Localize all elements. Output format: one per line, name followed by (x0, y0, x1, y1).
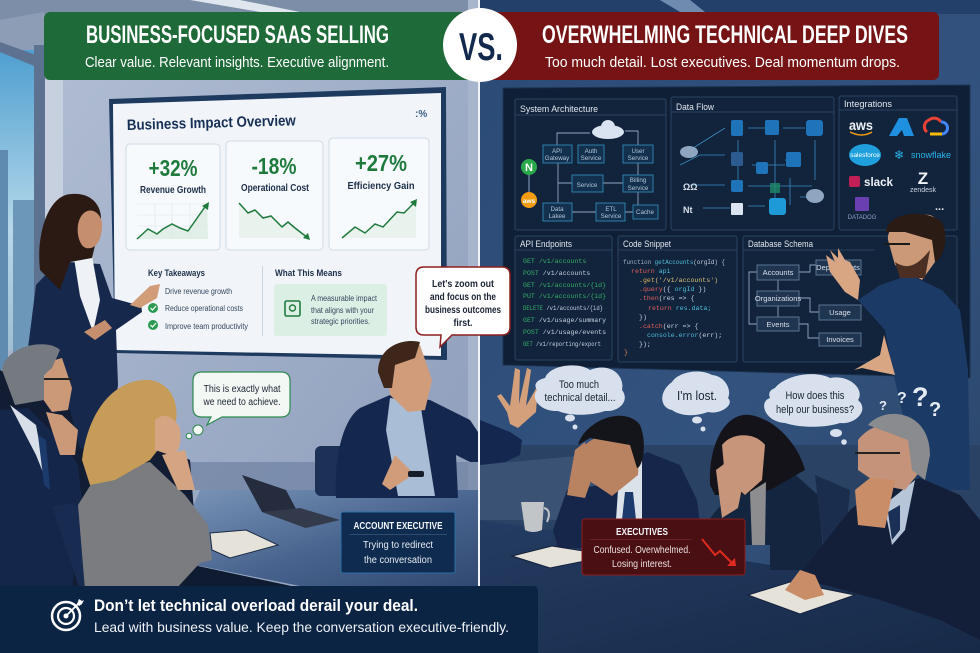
header: overwhelming technical deep dives (478, 12, 939, 80)
panel: code snippet: } (624, 349, 628, 356)
panel: database schema: Invoices (826, 335, 854, 344)
speech bubble: zoom out: Let's zoom out (432, 278, 494, 290)
panel: code snippet: return res.data; (648, 305, 711, 312)
thought bubble: I'm lost (662, 371, 730, 432)
thought bubble: how does this help (764, 374, 862, 445)
thought bubble: exactly what we need: This is exactly what (204, 384, 281, 395)
callout: executives: EXECUTIVES (616, 526, 668, 538)
panel: system architecture: User (631, 148, 645, 155)
key takeaways: Key Takeaways (148, 268, 205, 279)
thought bubble: too much technical detail: technical detail... (544, 392, 616, 404)
panel: system architecture: Data (550, 206, 564, 213)
callout: executives: Losing interest. (612, 559, 672, 570)
icon: percent: :% (415, 109, 427, 120)
thought bubble: too much technical detail: Too much (559, 379, 599, 391)
panel: API endpoints: PUT /v1/accounts/{id} (523, 293, 606, 300)
KPI card: operational cost: Operational Cost (241, 183, 310, 194)
panel: database schema: Database Schema (748, 239, 814, 250)
thought bubble: exactly what we need (186, 372, 290, 439)
panel: system architecture: Cache (636, 209, 654, 216)
chair behind executive (815, 475, 850, 560)
panel: data flow (671, 97, 834, 230)
hand on notebook (785, 570, 824, 600)
panel: system architecture: Service (628, 155, 649, 162)
key takeaways (148, 268, 248, 331)
thought bubble: exactly what we need: we need to achieve. (203, 397, 280, 408)
key takeaways: Improve team productivity (165, 322, 248, 331)
what this means: that aligns with your (311, 306, 374, 315)
chair (52, 503, 142, 590)
icon: target (52, 599, 84, 630)
KPI card: efficiency gain: Efficiency Gain (348, 181, 414, 192)
panel: code snippet: .get('/v1/accounts') (639, 277, 718, 284)
speech bubble: zoom out (416, 267, 510, 347)
panel: API endpoints: API Endpoints (520, 239, 572, 250)
left room background (0, 0, 480, 590)
speech bubble: zoom out: first. (454, 317, 473, 329)
panel: system architecture: aws (523, 198, 536, 205)
laptop (242, 475, 340, 528)
right subheading: Too much detail. Lost executives. Deal momentum drops. (545, 54, 900, 71)
KPI card: revenue growth: +32% (148, 155, 198, 181)
screen title: Business Impact Overview (127, 112, 296, 134)
panel: integrations: Z (918, 169, 928, 188)
panel: system architecture: Service (577, 182, 598, 189)
panel: data flow: Nt (683, 205, 692, 215)
panel: API endpoints: GET /v1/usage/summary (523, 317, 606, 324)
person: technical presenter (826, 214, 970, 490)
panel: database schema: Accounts (763, 268, 794, 277)
key takeaways: Drive revenue growth (165, 287, 232, 296)
panel: API endpoints: GET /v1/accounts/{id} (523, 282, 606, 289)
panel: API endpoints: POST /v1/accounts (523, 270, 590, 277)
panel: database schema: Events (767, 320, 790, 329)
thought bubble: how does this help: How does this (786, 390, 845, 402)
panel: database schema (743, 236, 957, 362)
panel: system architecture: Service (601, 213, 622, 220)
panel: system architecture (515, 99, 666, 230)
KPI card: operational cost: -18% (252, 153, 296, 179)
left heading: BUSINESS-FOCUSED SAAS SELLING (86, 21, 389, 49)
divider (478, 0, 480, 587)
panel: database schema: Usage (829, 308, 851, 317)
notebook, right (748, 582, 855, 614)
panel: system architecture: Gateway (545, 155, 570, 162)
panel: data flow: ΩΩ (683, 182, 697, 192)
person: executive woman (707, 415, 825, 570)
what this means (274, 268, 387, 336)
left subheading: Clear value. Relevant insights. Executive alignment. (85, 54, 389, 71)
thought bubble: I'm lost: I'm lost. (677, 388, 717, 403)
panel: database schema: Deployments (816, 263, 860, 272)
panel: system architecture: Billing (630, 177, 647, 184)
panel: code snippet: console.error(err); (647, 332, 722, 339)
left table (170, 490, 479, 588)
person: presenter woman (28, 194, 160, 452)
panel: code snippet: .catch(err => { (639, 323, 698, 330)
footer subline: Lead with business value. Keep the conversation executive-friendly. (94, 619, 509, 635)
KPI card: operational cost (226, 141, 323, 250)
what this means: A measurable impact (311, 294, 378, 303)
panel: system architecture: Service (581, 155, 602, 162)
panel: code snippet: .then(res => { (639, 295, 694, 302)
panel: system architecture: N (525, 162, 533, 174)
question marks: ? (912, 382, 928, 412)
panel: code snippet: return api (631, 268, 671, 275)
thought bubble: how does this help: help our business? (776, 404, 854, 416)
footer banner (0, 586, 538, 653)
icon: falling arrow (702, 539, 736, 566)
what this means: strategic priorities. (311, 317, 370, 326)
panel: API endpoints: GET /v1/reporting/export (523, 341, 601, 348)
panel: data flow: Data Flow (676, 102, 714, 113)
VS badge: VS. (459, 26, 503, 69)
question marks: ? (929, 399, 941, 421)
panel: integrations: aws (849, 117, 873, 133)
question marks: ? (897, 390, 907, 407)
panel: API endpoints: POST /v1/usage/events (523, 329, 606, 336)
panel: code snippet: function getAccounts(orgId) { (623, 259, 725, 266)
panel: integrations: zendesk (910, 187, 937, 194)
footer headline: Don’t let technical overload derail your deal. (94, 597, 418, 615)
panel: API endpoints (515, 236, 612, 360)
panel: system architecture: API (552, 148, 562, 155)
question marks (879, 382, 941, 421)
panel: integrations: slack (864, 175, 893, 189)
panel: integrations: salesforce (850, 152, 880, 159)
presentation screen: business impact overview (109, 87, 447, 360)
panel: system architecture: System Architecture (520, 104, 598, 115)
panel: system architecture: Service (628, 185, 649, 192)
callout: executives: Confused. Overwhelmed. (594, 545, 690, 556)
panel: code snippet: Code Snippet (623, 239, 671, 250)
panel: database schema: Organizations (755, 294, 801, 303)
panel: code snippet: }); (639, 341, 651, 348)
callout: account executive (341, 512, 455, 573)
callout: account executive: Trying to redirect (363, 540, 433, 551)
panel: API endpoints: DELETE /v1/accounts/{id} (523, 305, 603, 312)
callout: executives (582, 519, 745, 575)
KPI card: efficiency gain: +27% (355, 150, 407, 176)
notebook, centre (512, 546, 590, 568)
person: executive with head in hand (553, 416, 702, 548)
person: grey-haired executive (795, 414, 980, 640)
KPI card: efficiency gain (329, 138, 429, 250)
panel: integrations: snowflake (911, 150, 951, 160)
right room background (480, 0, 980, 590)
notebook, left (210, 530, 278, 558)
what this means: What This Means (275, 268, 342, 279)
VS badge (443, 8, 517, 82)
hand raised, account executive (480, 368, 538, 465)
KPI card: revenue growth: Revenue Growth (140, 185, 206, 196)
KPI card: revenue growth (126, 144, 220, 250)
key takeaways: Reduce operational costs (165, 304, 243, 313)
callout: account executive: the conversation (364, 555, 432, 566)
person: account executive (315, 341, 490, 498)
right table (480, 520, 980, 653)
thought bubble: too much technical detail (535, 365, 625, 430)
panel: API endpoints: GET /v1/accounts (523, 258, 586, 265)
panel: integrations: ... (935, 201, 944, 213)
question marks: ? (879, 398, 887, 413)
person: grey-haired man, left (0, 344, 82, 590)
panel: system architecture: ETL (605, 206, 617, 213)
speech bubble: zoom out: business outcomes (425, 304, 501, 316)
panel: code snippet: }) (639, 314, 647, 321)
panel: integrations: DATADOG (848, 215, 877, 221)
coffee mug (521, 502, 549, 532)
technical screen (503, 85, 970, 378)
panel: integrations: ❄ (894, 148, 904, 162)
panel: system architecture: Auth (585, 148, 598, 155)
panel: code snippet (618, 236, 737, 362)
panel: code snippet: .query({ orgId }) (639, 286, 706, 293)
panel: integrations: Integrations (844, 99, 892, 110)
header: business-focused saas selling (44, 12, 484, 80)
person: blonde woman (78, 380, 212, 590)
panel: integrations (839, 96, 957, 230)
callout: account executive: ACCOUNT EXECUTIVE (354, 521, 443, 532)
panel: system architecture: Lakee (549, 213, 566, 220)
speech bubble: zoom out: and focus on the (430, 291, 496, 303)
